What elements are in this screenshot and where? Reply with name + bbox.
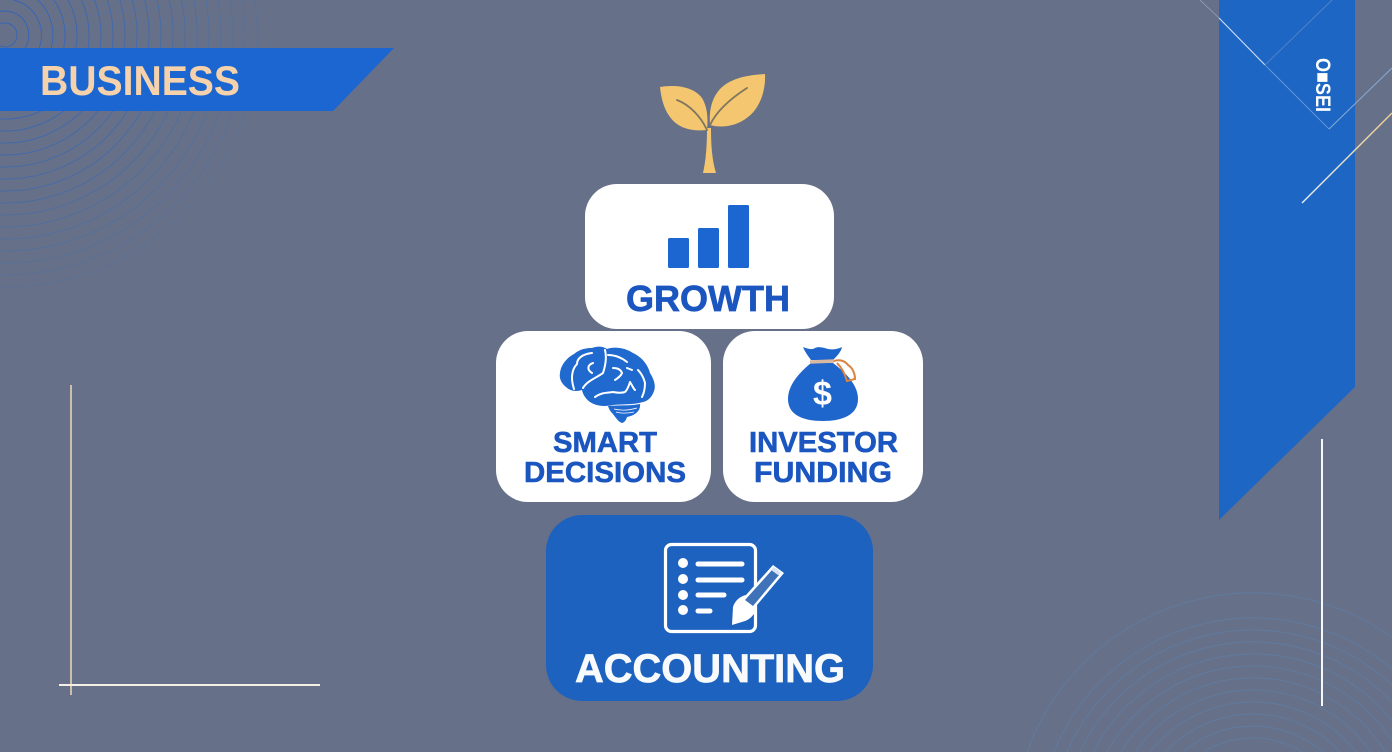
- title text: BUSINESS: [40, 57, 240, 104]
- panel: investor funding: [723, 331, 923, 502]
- accounting label: ACCOUNTING: [575, 647, 845, 691]
- panel: accounting: [546, 515, 873, 701]
- icon: checklist with pencil: [666, 544, 784, 632]
- dollar sign: $: [813, 375, 832, 413]
- icon: bar chart: [668, 205, 749, 268]
- icon: brain: [560, 347, 655, 423]
- banner vertical text: O■SEI: [1311, 58, 1334, 112]
- right vertical banner: [1219, 0, 1355, 520]
- concentric rings: top left: [0, 0, 257, 287]
- investor funding label: [749, 427, 898, 489]
- smart decisions label: DECISIONS: [524, 457, 686, 489]
- banner accent lines: [1200, 0, 1392, 203]
- title ribbon: [0, 48, 394, 111]
- investor funding label: INVESTOR: [749, 427, 898, 459]
- concentric rings: bottom right: [1027, 593, 1392, 752]
- growth label: GROWTH: [626, 278, 790, 319]
- icon: sprout: [660, 74, 765, 173]
- corner frame lines: bottom left: [59, 385, 320, 695]
- smart decisions label: [524, 427, 686, 489]
- investor funding label: FUNDING: [754, 457, 892, 489]
- icon: money bag: [788, 347, 858, 421]
- panel: growth: [585, 184, 834, 329]
- panel: smart decisions: [496, 331, 711, 502]
- smart decisions label: SMART: [553, 427, 657, 459]
- frame line: right: [1321, 439, 1323, 706]
